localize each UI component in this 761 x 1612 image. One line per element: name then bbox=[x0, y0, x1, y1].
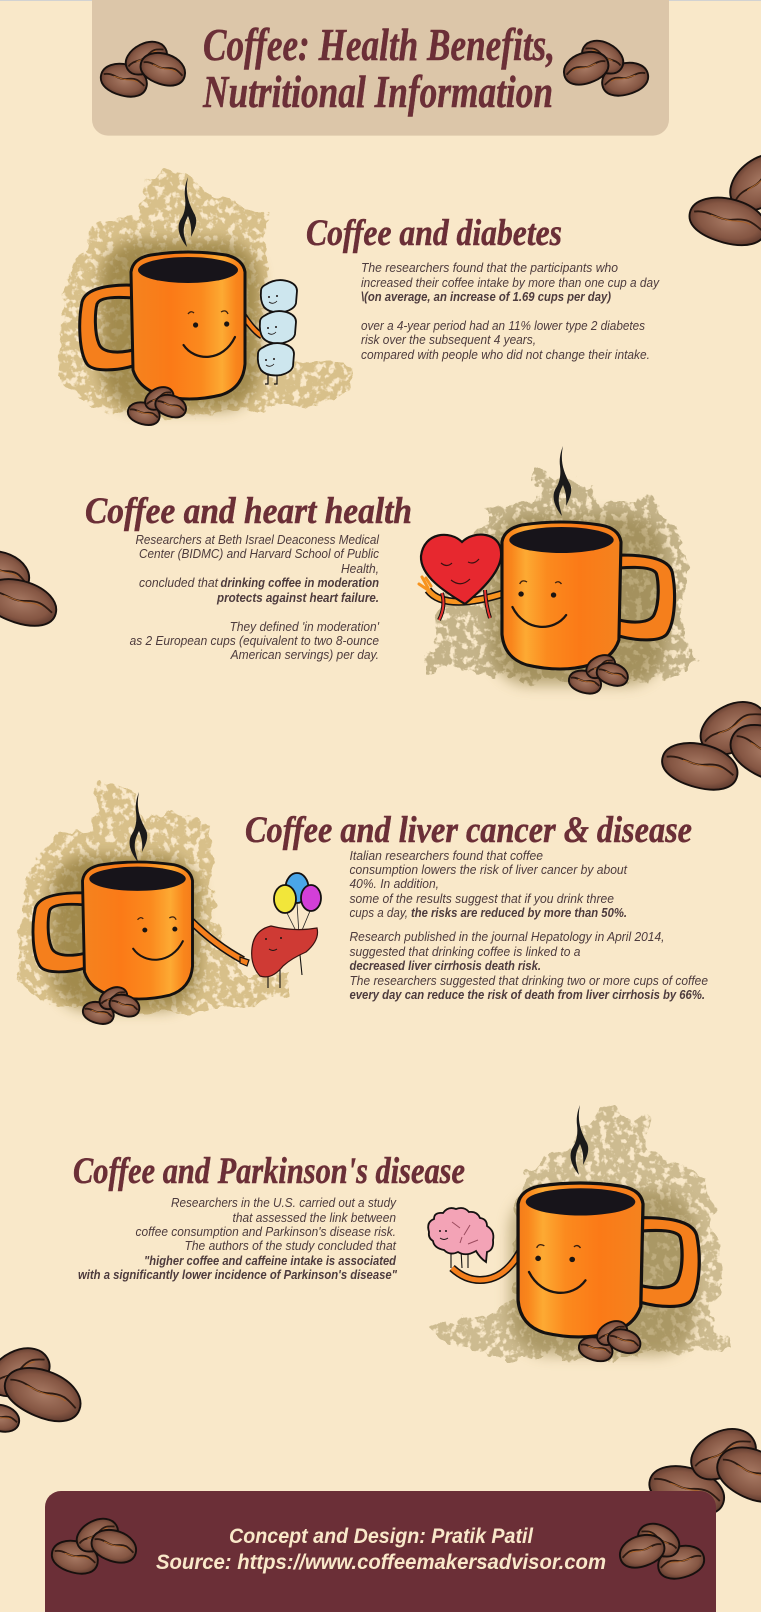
text block: The authors of the study concluded that bbox=[184, 1238, 397, 1253]
icon: left footer beans bbox=[49, 1512, 140, 1577]
illustration: mug with brain bbox=[428, 1105, 728, 1364]
footer credits: Concept and Design: Pratik Patil bbox=[229, 1525, 534, 1548]
heading: Coffee and liver cancer & disease bbox=[245, 810, 692, 851]
text block: every day can reduce the risk of death from liver cirrhosis by 66%. bbox=[350, 987, 705, 1002]
panel: coffee and liver bbox=[15, 780, 708, 1026]
text block: The researchers found that the participants who bbox=[361, 260, 618, 275]
text block bbox=[78, 1195, 398, 1282]
corner beans: right middle bbox=[658, 691, 761, 795]
text block: Health, bbox=[341, 561, 379, 576]
icon: left coffee beans bbox=[98, 35, 189, 100]
text block: increased their coffee intake by more than one cup a day bbox=[361, 275, 660, 290]
text block: The researchers suggested that drinking two or more cups of coffee bbox=[350, 973, 708, 988]
icon: steam bbox=[571, 1105, 588, 1175]
title: Coffee: Health Benefits, bbox=[203, 19, 555, 70]
icon: beans bbox=[567, 650, 631, 696]
heading: Coffee and heart health bbox=[85, 491, 412, 532]
corner beans: bottom left bbox=[0, 1338, 88, 1434]
icon: mug bbox=[502, 522, 675, 669]
heading: Coffee and Parkinson's disease bbox=[73, 1151, 465, 1192]
footer panel bbox=[45, 1491, 716, 1612]
illustration: mug with sugar cubes bbox=[56, 172, 352, 427]
text block: with a significantly lower incidence of Parkinson's disease" bbox=[78, 1267, 398, 1282]
text block: Italian researchers found that coffee bbox=[350, 848, 543, 863]
text block: 40%. In addition, bbox=[350, 876, 439, 891]
header panel bbox=[92, 0, 669, 136]
text block: Research published in the journal Hepatology in April 2014, bbox=[350, 929, 664, 944]
text block: Researchers at Beth Israel Deaconess Medical bbox=[136, 532, 380, 547]
text block: "higher coffee and caffeine intake is associated bbox=[144, 1253, 397, 1268]
panel: coffee and parkinson's bbox=[73, 1105, 728, 1364]
footer credits: Source: https://www.coffeemakersadvisor.com bbox=[156, 1551, 606, 1574]
corner beans: left bbox=[0, 544, 62, 632]
text block: decreased liver cirrhosis death risk. bbox=[350, 958, 541, 973]
text block: some of the results suggest that if you drink three bbox=[350, 891, 614, 906]
text block bbox=[130, 532, 380, 662]
text block: over a 4-year period had an 11% lower type 2 diabetes bbox=[361, 318, 645, 333]
text block: coffee consumption and Parkinson's disease risk. bbox=[136, 1224, 396, 1239]
panel: coffee and heart health bbox=[85, 446, 701, 696]
icon: beans bbox=[81, 982, 142, 1026]
corner beans: bottom right bbox=[644, 1418, 761, 1521]
heading: Coffee and diabetes bbox=[306, 213, 562, 254]
icon: steam bbox=[179, 177, 196, 247]
text block: protects against heart failure. bbox=[216, 590, 379, 605]
text block: \(on average, an increase of 1.69 cups per day) bbox=[361, 289, 611, 304]
text block: compared with people who did not change their intake. bbox=[361, 347, 650, 362]
text block: risk over the subsequent 4 years, bbox=[361, 332, 536, 347]
text block: concluded that bbox=[139, 575, 219, 590]
text block: that assessed the link between bbox=[232, 1210, 396, 1225]
text block: American servings) per day. bbox=[230, 647, 379, 662]
icon: steam bbox=[130, 792, 147, 862]
text block: Researchers in the U.S. carried out a study bbox=[171, 1195, 397, 1210]
text block: They defined 'in moderation' bbox=[230, 619, 379, 634]
text block bbox=[350, 848, 708, 1002]
text block bbox=[361, 260, 660, 362]
footer credits bbox=[156, 1525, 606, 1574]
icon: beans bbox=[126, 382, 189, 427]
icon: heart bbox=[421, 535, 501, 620]
icon: beans bbox=[577, 1316, 643, 1364]
text block: suggested that drinking coffee is linked to a bbox=[350, 944, 580, 959]
text block: cups a day, bbox=[350, 905, 408, 920]
text block: the risks are reduced by more than 50%. bbox=[411, 905, 627, 920]
title: Nutritional Information bbox=[202, 66, 553, 117]
illustration: mug with heart bbox=[419, 446, 701, 696]
text block: Center (BIDMC) and Harvard School of Public bbox=[139, 546, 379, 561]
corner beans: top right bbox=[685, 142, 761, 251]
icon: mug bbox=[80, 252, 245, 399]
text block: as 2 European cups (equivalent to two 8-ounce bbox=[130, 633, 379, 648]
icon: mug bbox=[33, 862, 193, 999]
text block: consumption lowers the risk of liver cancer by about bbox=[350, 862, 628, 877]
icon: mug bbox=[518, 1183, 699, 1337]
icon: brain bbox=[428, 1208, 493, 1268]
icon: sugar cubes bbox=[258, 280, 297, 375]
icon: liver bbox=[252, 926, 318, 988]
icon: steam bbox=[554, 446, 571, 516]
illustration: mug with liver and balloons bbox=[15, 780, 321, 1026]
icon: right footer beans bbox=[616, 1517, 707, 1582]
title bbox=[202, 19, 555, 117]
panel: coffee and diabetes bbox=[56, 172, 660, 427]
icon: balloons bbox=[274, 873, 321, 935]
icon: right coffee beans bbox=[560, 34, 651, 99]
text block: drinking coffee in moderation bbox=[220, 575, 379, 590]
